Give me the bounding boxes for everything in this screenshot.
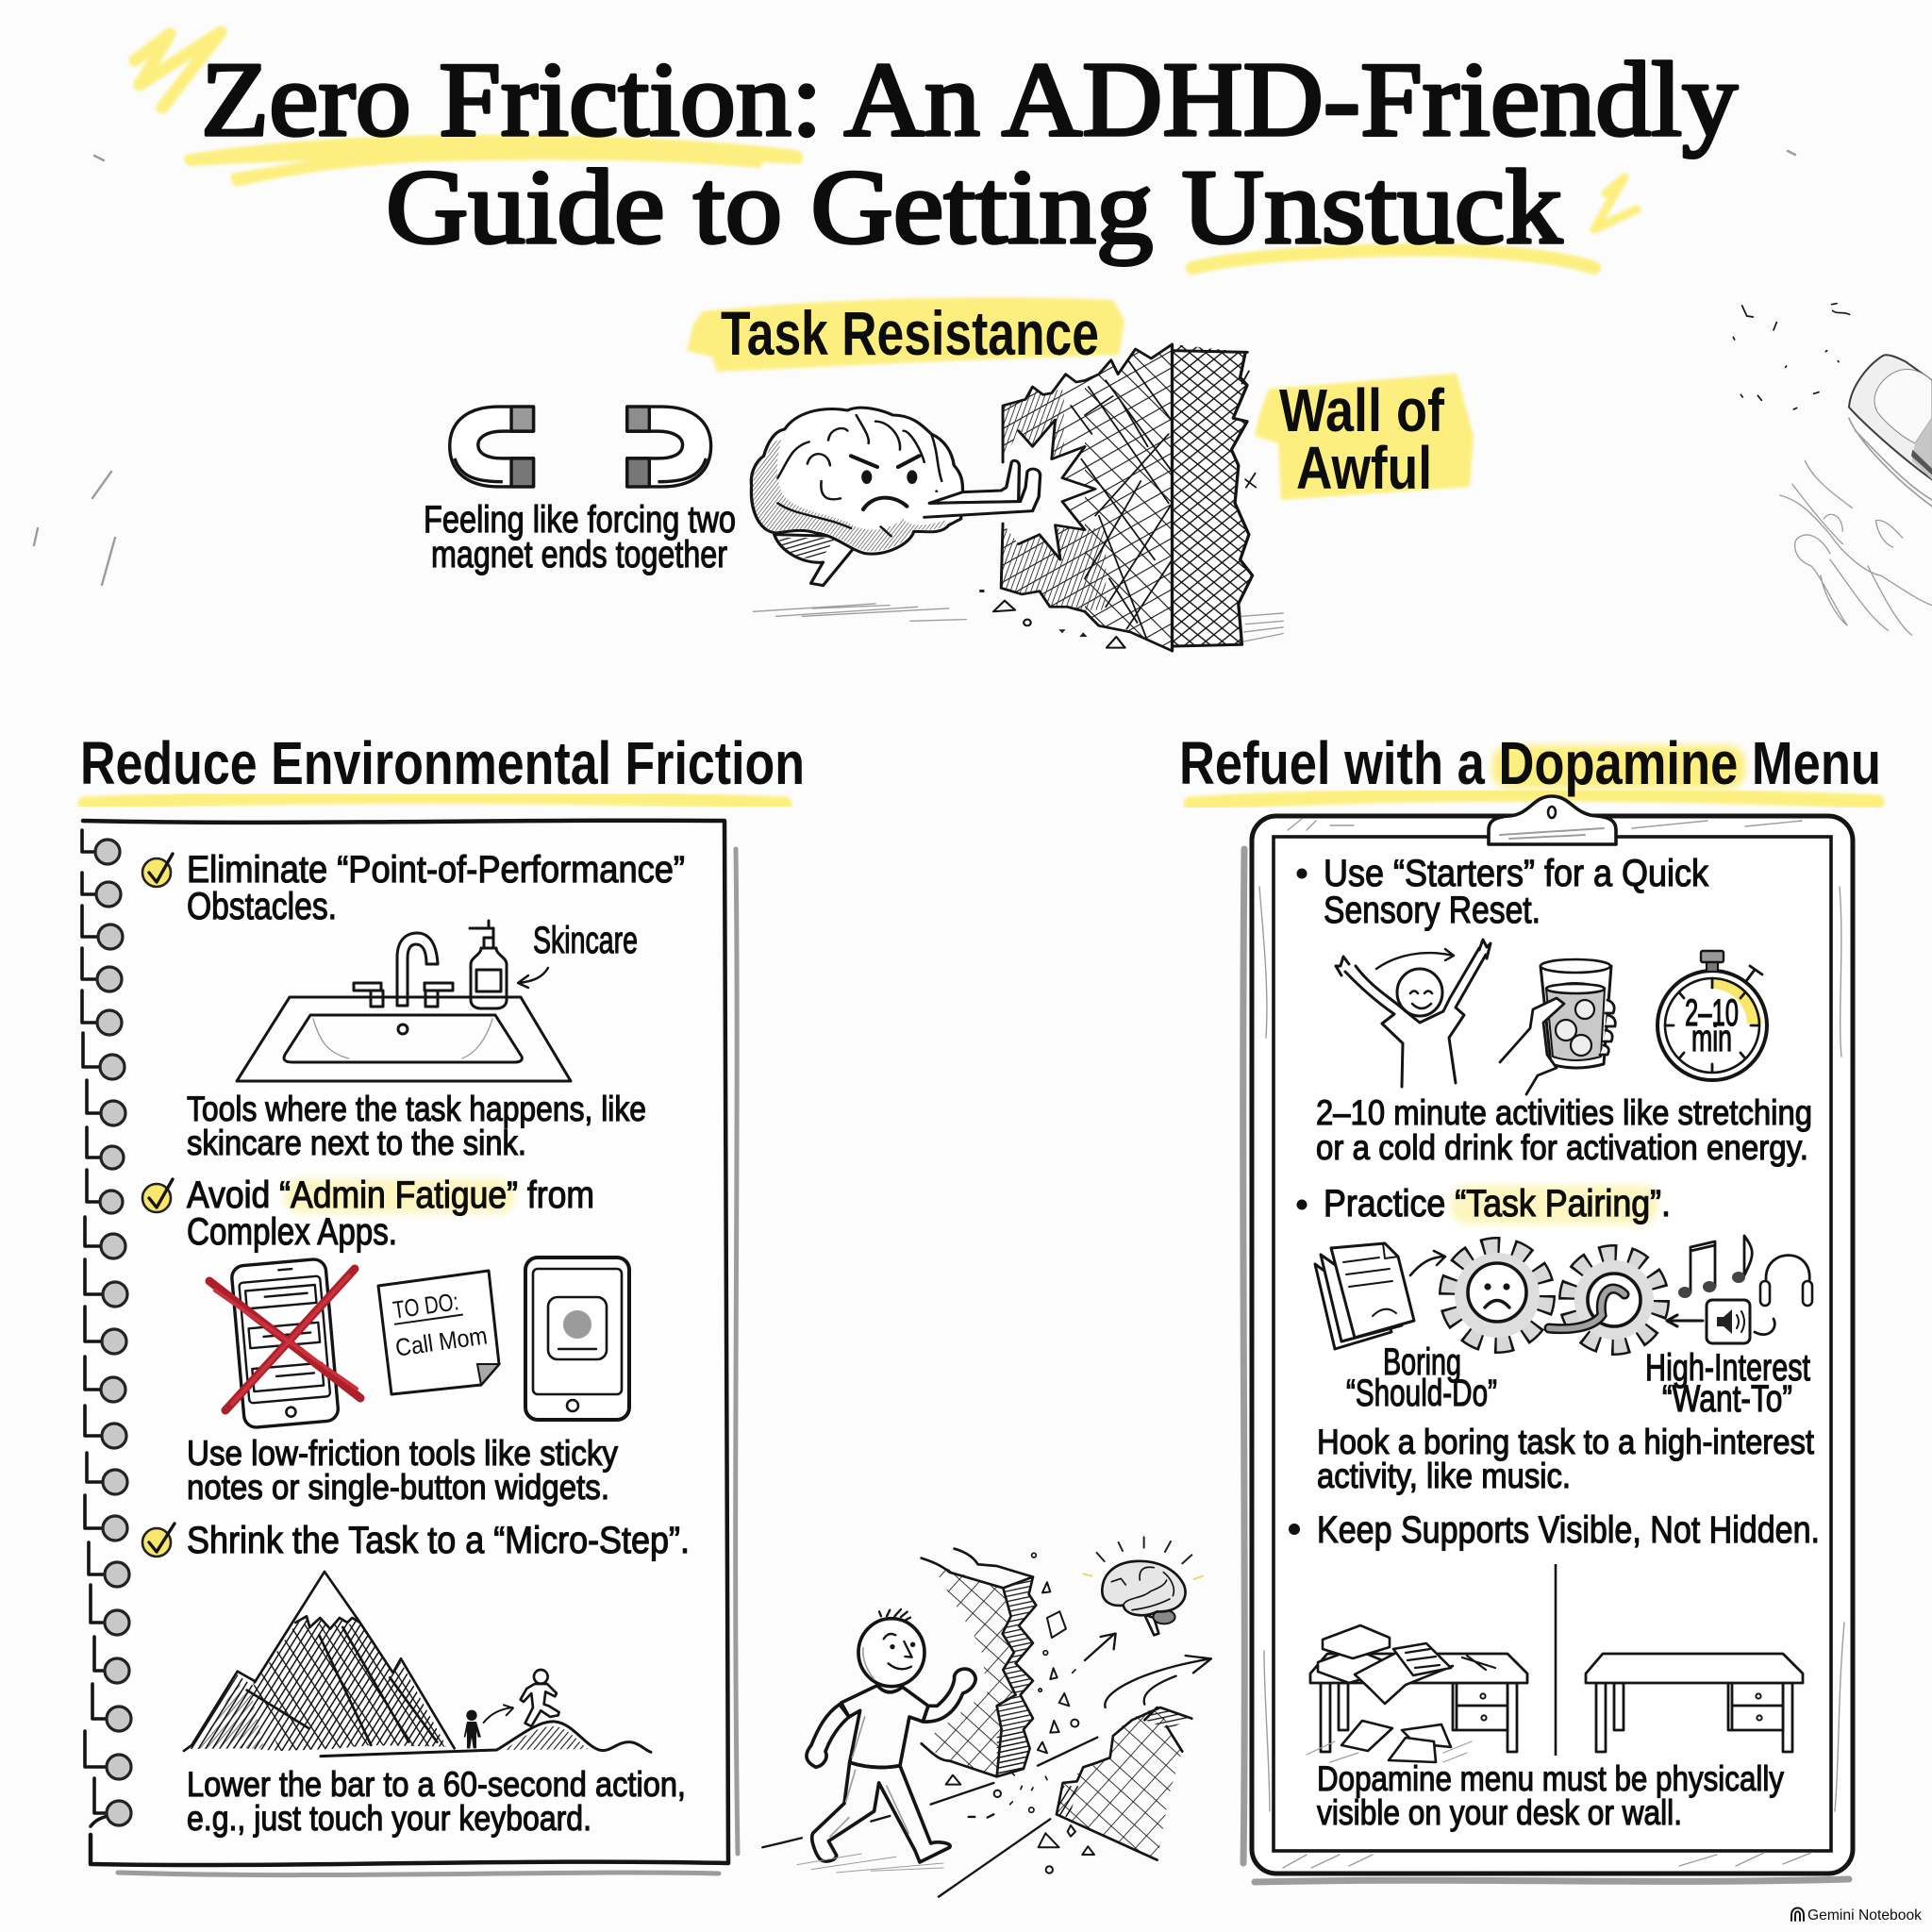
icon: sticky note to do call mom [378, 1271, 499, 1394]
icon: happy glowing brain [1083, 1537, 1203, 1635]
bullet: starters: Sensory Reset. [1324, 890, 1541, 931]
text: hook a boring task [1317, 1423, 1815, 1495]
section heading: reduce environmental friction: Reduce Environmental Friction [80, 729, 805, 797]
text: tools where the task happens: Tools where the task happens, like [187, 1090, 646, 1128]
icon: hand holding cold drink [1500, 959, 1615, 1094]
text: dopamine menu visible: visible on your desk or wall. [1317, 1793, 1682, 1832]
bullet: admin fatigue: Avoid “Admin Fatigue” from [187, 1174, 594, 1216]
icon: clear desk [1586, 1654, 1803, 1752]
icon: cluttered desk [1307, 1625, 1527, 1762]
faint pencil marks left [34, 151, 1795, 585]
panel: clipboard [1243, 796, 1853, 1882]
bullet: point of performance: Eliminate “Point-of-Performance” [187, 849, 685, 891]
labels: should-do and want-to [1346, 1341, 1810, 1420]
icon: two repelling magnets [450, 407, 711, 487]
text: hook a boring task: activity, like music. [1317, 1457, 1571, 1495]
icon: single button widget phone [525, 1257, 629, 1420]
label: Task Resistance: Task Resistance [721, 298, 1099, 368]
icon: stretching person [1336, 940, 1491, 1087]
panel: spiral notebook [82, 821, 738, 1875]
text: lower the bar: e.g., just touch your keyboard. [187, 1799, 591, 1838]
arrows forward [1085, 1634, 1211, 1707]
labels: should-do and want-to: “Want-To” [1662, 1378, 1792, 1420]
text: activation energy: or a cold drink for activation energy. [1316, 1128, 1808, 1167]
ground and debris [762, 1553, 1097, 1897]
eraser and pencil marks [1733, 304, 1932, 635]
bullet: starters [1296, 853, 1709, 931]
broken wall left half [922, 1549, 1036, 1776]
icon: stopwatch two to ten minutes [1657, 951, 1767, 1080]
label: Wall of Awful: Wall of [1279, 376, 1445, 444]
icon: crossed out complex app phone [209, 1258, 360, 1428]
text: tools where the task happens [187, 1090, 646, 1162]
bullet: point of performance: Obstacles. [187, 886, 337, 927]
labels: should-do and want-to: Boring [1383, 1341, 1461, 1383]
broken wall right half [1057, 1707, 1191, 1860]
icon: sink with skincare bottle [237, 920, 638, 1081]
icon: sink with skincare bottle: Skincare [533, 920, 638, 961]
caption: magnet analogy: magnet ends together [431, 534, 727, 575]
icon: sticky note to do call mom: TO DO: [391, 1287, 460, 1324]
text: activation energy [1316, 1093, 1812, 1167]
icon: music notes, speaker and headphones [1667, 1236, 1812, 1343]
icon: stopwatch two to ten minutes: min [1691, 1018, 1732, 1059]
bullet: point of performance [142, 849, 685, 927]
caption: magnet analogy: Feeling like forcing two [424, 499, 736, 541]
icon: stack of boring papers [1315, 1243, 1445, 1349]
title: Zero Friction: An ADHD-Friendly [201, 42, 1738, 158]
bullet: admin fatigue: Complex Apps. [187, 1211, 397, 1253]
title highlight strokes [135, 32, 1637, 268]
label: Wall of Awful [1255, 374, 1474, 502]
illustration: person walking through broken wall [762, 1537, 1211, 1897]
notebook spiral rings [82, 830, 131, 1826]
clipboard clip [1489, 796, 1616, 844]
icon: two interlocked gears [1448, 1246, 1660, 1346]
text: lower the bar [187, 1765, 686, 1838]
icon: sticky note to do call mom: Call Mom [393, 1321, 489, 1362]
illustration: wall of awful [979, 340, 1283, 654]
bullet: starters: Use “Starters” for a Quick [1324, 853, 1709, 894]
bullet: admin fatigue [142, 1174, 594, 1253]
caption: magnet analogy [424, 499, 736, 575]
text: low friction tools [187, 1434, 618, 1507]
bullet: keep supports visible: Keep Supports Visible, Not Hidden. [1317, 1509, 1820, 1551]
text: low friction tools: notes or single-button widgets. [187, 1468, 609, 1507]
title: Guide to Getting Unstuck [386, 149, 1562, 266]
text: low friction tools: Use low-friction tools like sticky [187, 1434, 618, 1473]
bullet: task pairing: Practice “Task Pairing”. [1324, 1183, 1671, 1224]
bullet: micro step: Shrink the Task to a “Micro-Step”. [187, 1520, 690, 1561]
text: lower the bar: Lower the bar to a 60-second action, [187, 1765, 686, 1804]
icon: stopwatch two to ten minutes: 2–10 [1685, 992, 1739, 1034]
illustration: angry brain pushing the wall [751, 408, 1041, 621]
text: dopamine menu visible [1317, 1759, 1784, 1832]
footer: Gemini Notebook watermark: Gemini Notebook [1807, 1907, 1923, 1924]
title [201, 42, 1738, 266]
labels: should-do and want-to: “Should-Do” [1346, 1373, 1497, 1414]
person walking [797, 1609, 975, 1873]
text: hook a boring task: Hook a boring task to a high-interest [1317, 1423, 1815, 1461]
text: tools where the task happens: skincare next to the sink. [187, 1124, 526, 1162]
text: dopamine menu visible: Dopamine menu must be physically [1317, 1759, 1784, 1798]
labels: should-do and want-to: High-Interest [1645, 1347, 1810, 1389]
label: Wall of Awful: Awful [1296, 434, 1432, 502]
icon: mountain and tiny step [184, 1572, 651, 1757]
text: activation energy: 2–10 minute activities like stretching [1316, 1093, 1812, 1132]
